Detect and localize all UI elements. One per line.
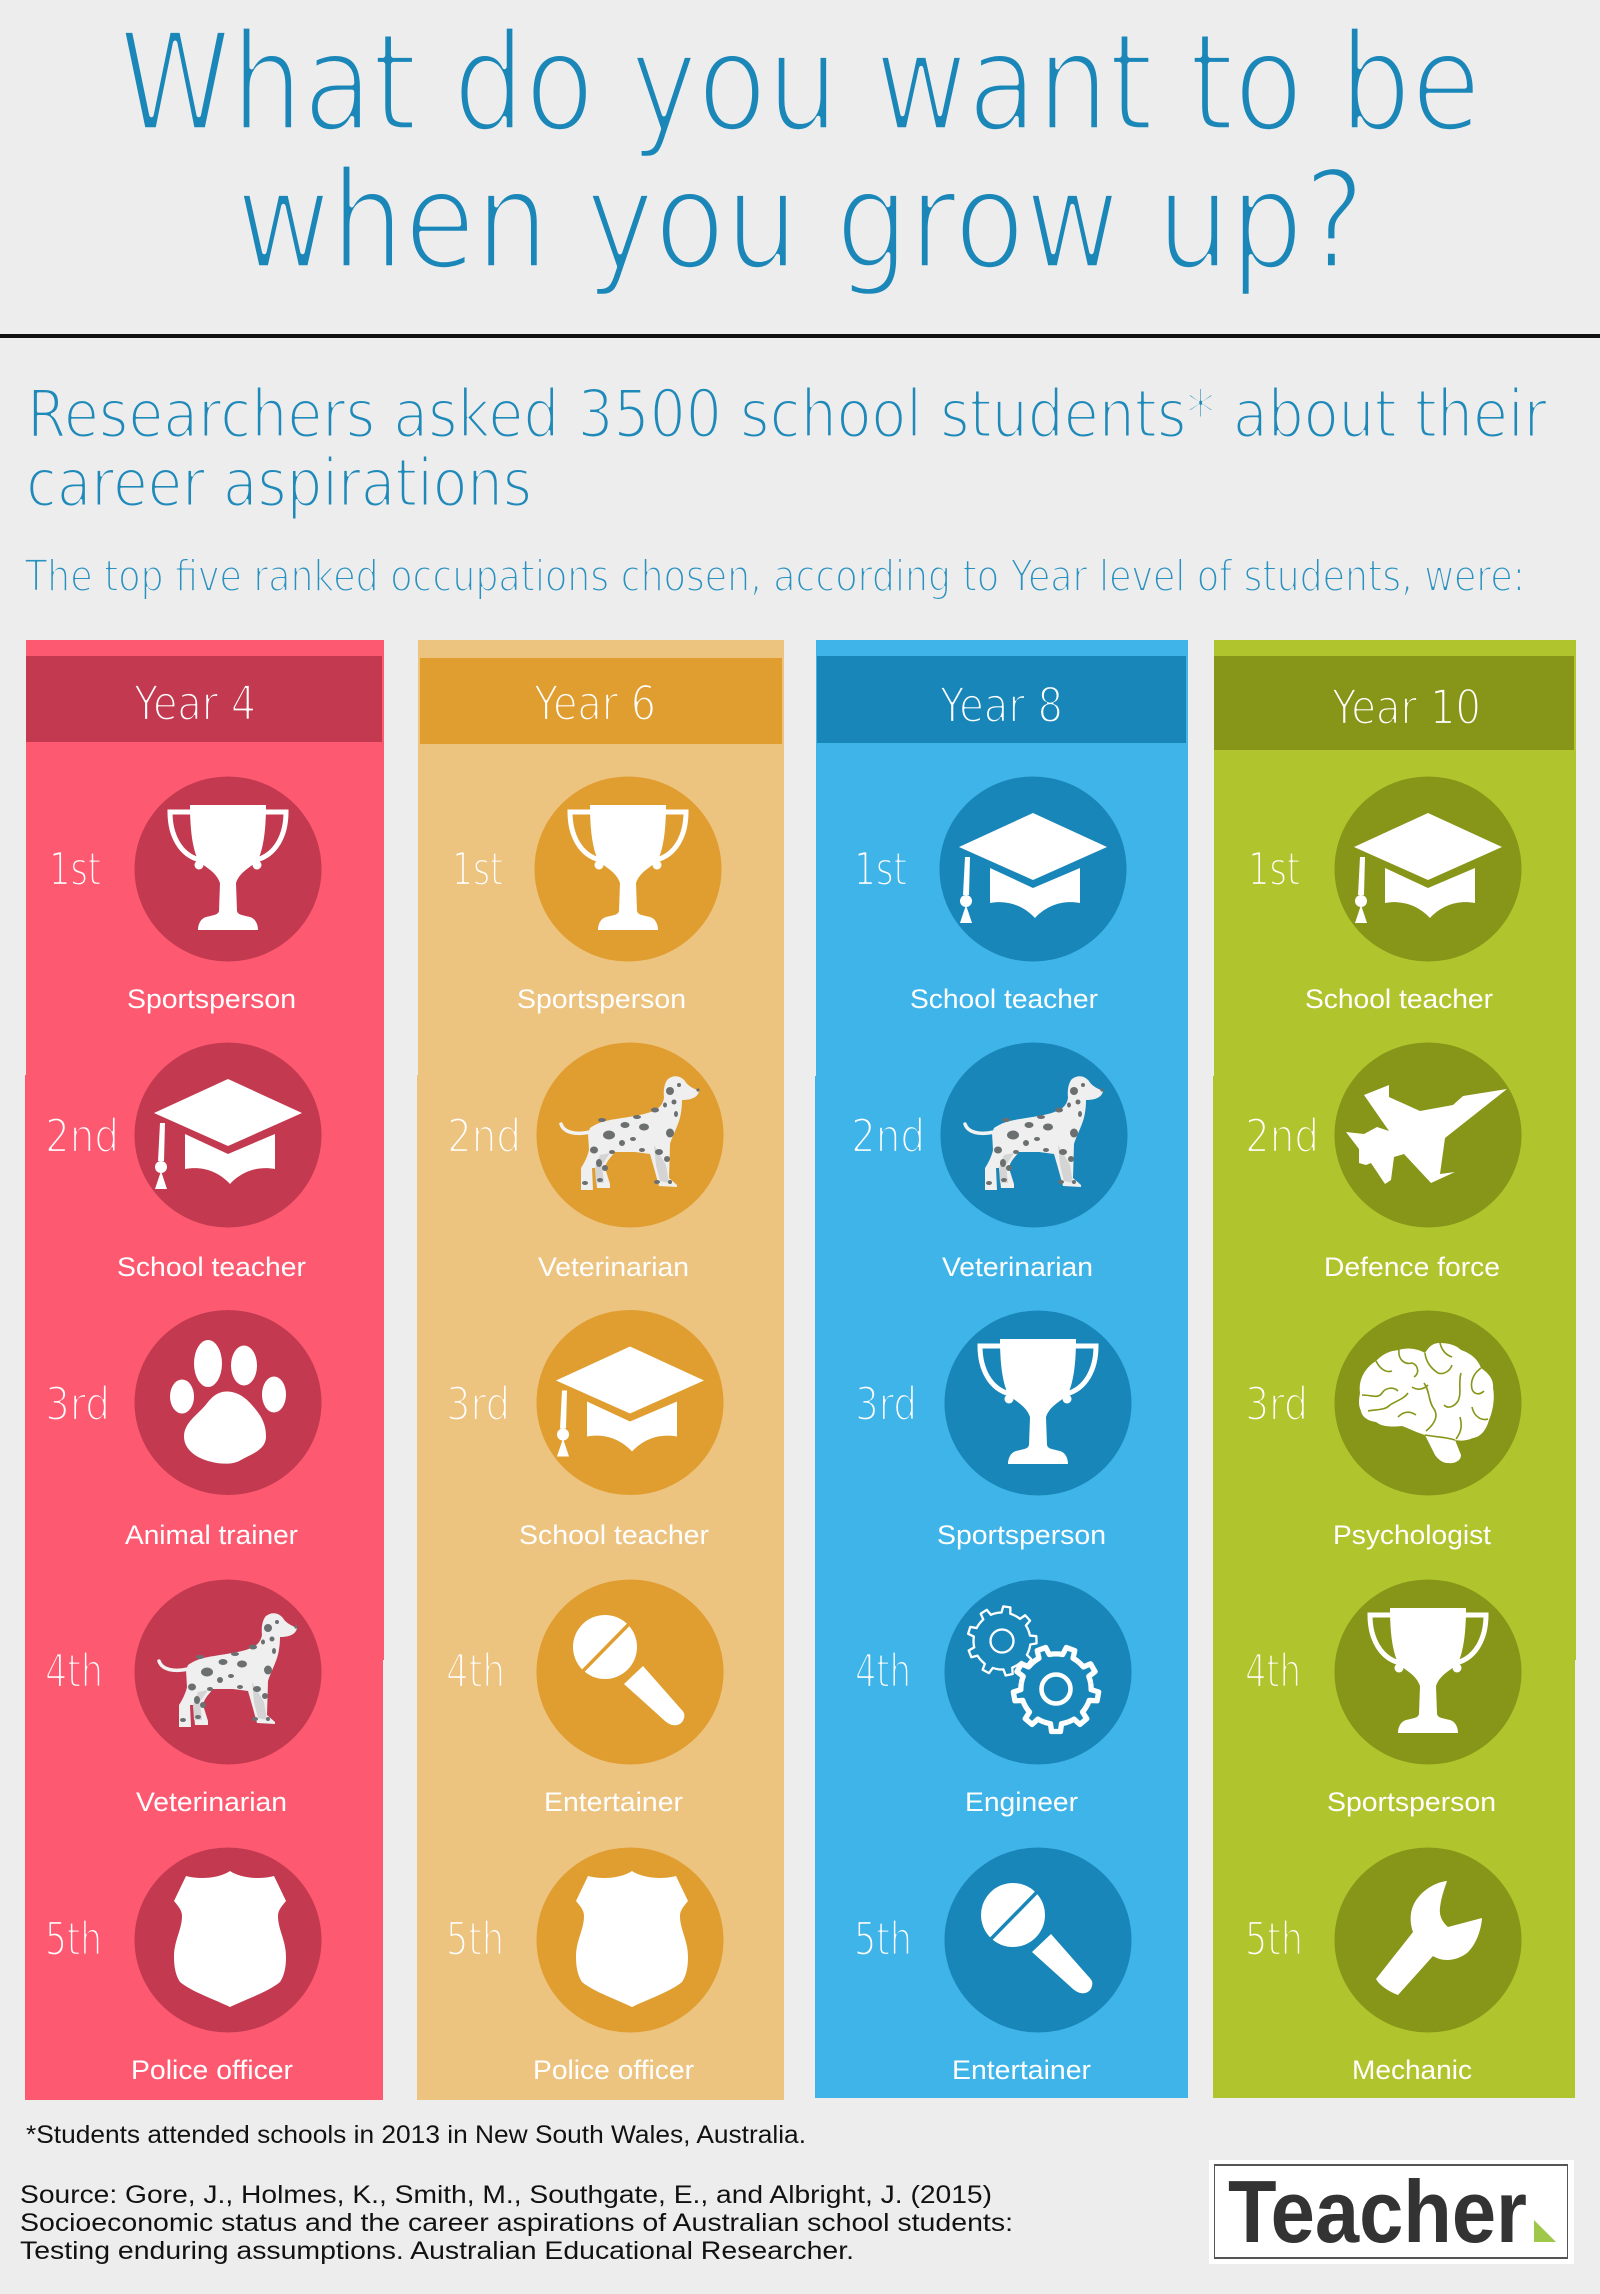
row: 1st Sportsperson: 1st: [49, 842, 101, 896]
row: 5th Mechanic: 5th: [1245, 1912, 1303, 1966]
row: 3rd School teacher: School teacher: [519, 1520, 709, 1550]
row: 4th Engineer: 4th: [855, 1644, 911, 1698]
header: Year 8: [817, 656, 1186, 743]
header: Year 8: Year 8: [939, 678, 1063, 734]
row: 4th Sportsperson: [1245, 1580, 1522, 1817]
row: 2nd Veterinarian: 2nd: [447, 1109, 521, 1163]
heading: researchers asked: career aspirations: [26, 444, 532, 522]
title: [119, 4, 1481, 301]
row: 1st Sportsperson: Sportsperson: [517, 984, 686, 1014]
row: 2nd Defence force: [1245, 1042, 1522, 1282]
row: 2nd Veterinarian: 2nd: [851, 1109, 925, 1163]
logo: Teacher: Teacher: [1228, 2162, 1527, 2261]
row: 1st School teacher: 1st: [1248, 842, 1300, 896]
row: 2nd School teacher: School teacher: [117, 1252, 306, 1282]
footnote: *Students attended schools in 2013 in New South Wales, Australia.: [26, 2121, 806, 2149]
row: 2nd Veterinarian: Veterinarian: [538, 1252, 689, 1282]
row: 3rd Psychologist: 3rd: [1245, 1377, 1308, 1431]
header: Year 6: [420, 658, 782, 744]
row: 4th Engineer: [855, 1580, 1132, 1817]
row: 3rd Animal trainer: [45, 1310, 322, 1550]
row: 1st Sportsperson: [452, 776, 722, 1014]
row: 3rd School teacher: 3rd: [446, 1377, 510, 1431]
row: 5th Police officer: [446, 1848, 724, 2085]
row: 5th Police officer: Police officer: [533, 2055, 694, 2085]
panel: Year 4: [25, 640, 384, 2100]
source citation: Socioeconomic status and the career aspirations of Australian school students:: [20, 2209, 1013, 2237]
row: 1st Sportsperson: Sportsperson: [127, 984, 296, 1014]
row: 4th Sportsperson: Sportsperson: [1327, 1787, 1496, 1817]
row: 1st School teacher: School teacher: [1305, 984, 1493, 1014]
row: 3rd Animal trainer: Animal trainer: [125, 1520, 298, 1550]
row: 1st Sportsperson: [49, 776, 322, 1014]
row: 5th Police officer: [45, 1848, 322, 2085]
row: 3rd Psychologist: [1245, 1310, 1522, 1550]
row: 4th Entertainer: [446, 1580, 724, 1817]
row: 1st School teacher: [854, 776, 1126, 1014]
row: 1st School teacher: School teacher: [910, 984, 1098, 1014]
row: 5th Police officer: 5th: [446, 1912, 504, 1966]
row: 2nd Defence force: 2nd: [1245, 1109, 1319, 1163]
header: Year 10: Year 10: [1331, 680, 1481, 736]
row: 3rd Animal trainer: 3rd: [45, 1377, 110, 1431]
source citation: Source: Gore, J., Holmes, K., Smith, M., Southgate, E., and Albright, J. (2015): [20, 2181, 992, 2209]
row: 5th Mechanic: Mechanic: [1352, 2055, 1472, 2085]
row: 1st School teacher: 1st: [854, 842, 907, 896]
row: 5th Police officer: 5th: [45, 1912, 102, 1966]
row: 5th Police officer: Police officer: [131, 2055, 293, 2085]
row: 4th Sportsperson: 4th: [1245, 1644, 1301, 1698]
row: 2nd School teacher: [45, 1042, 322, 1282]
title: when you grow up?: [236, 142, 1365, 301]
row: 3rd Sportsperson: [855, 1310, 1132, 1550]
row: 5th Mechanic: [1245, 1848, 1522, 2085]
row: 5th Entertainer: 5th: [854, 1912, 912, 1966]
panel: Year 10: [1213, 640, 1576, 2098]
row: 2nd Veterinarian: [851, 1042, 1128, 1282]
row: 5th Entertainer: [854, 1848, 1132, 2085]
row: 2nd School teacher: 2nd: [45, 1109, 119, 1163]
row: 1st Sportsperson: 1st: [452, 842, 503, 896]
header: Year 4: [26, 656, 382, 742]
panel: Year 6: [417, 640, 784, 2100]
row: 3rd Psychologist: Psychologist: [1333, 1520, 1492, 1550]
heading: researchers asked: [26, 375, 1547, 522]
row: 2nd Veterinarian: Veterinarian: [942, 1252, 1093, 1282]
source citation: Testing enduring assumptions. Australian Educational Researcher.: [20, 2237, 854, 2265]
row: 4th Veterinarian: [45, 1580, 322, 1817]
row: 3rd Sportsperson: 3rd: [855, 1377, 917, 1431]
row: 4th Engineer: Engineer: [965, 1787, 1078, 1817]
panel: Year 8: [815, 640, 1188, 2098]
row: 3rd School teacher: [446, 1310, 724, 1550]
header: Year 10: [1214, 656, 1574, 750]
row: 2nd Veterinarian: [447, 1042, 724, 1282]
row: 5th Entertainer: Entertainer: [952, 2055, 1091, 2085]
row: 4th Entertainer: Entertainer: [544, 1787, 683, 1817]
row: 4th Veterinarian: 4th: [45, 1644, 103, 1698]
row: 2nd Defence force: Defence force: [1324, 1252, 1500, 1282]
header: Year 6: Year 6: [533, 676, 656, 732]
row: 4th Entertainer: 4th: [446, 1644, 505, 1698]
row: 3rd Sportsperson: Sportsperson: [937, 1520, 1106, 1550]
row: 4th Veterinarian: Veterinarian: [136, 1787, 287, 1817]
header: Year 4: Year 4: [133, 676, 256, 732]
source citation: [20, 2181, 1013, 2265]
row: 1st School teacher: [1248, 776, 1522, 1014]
